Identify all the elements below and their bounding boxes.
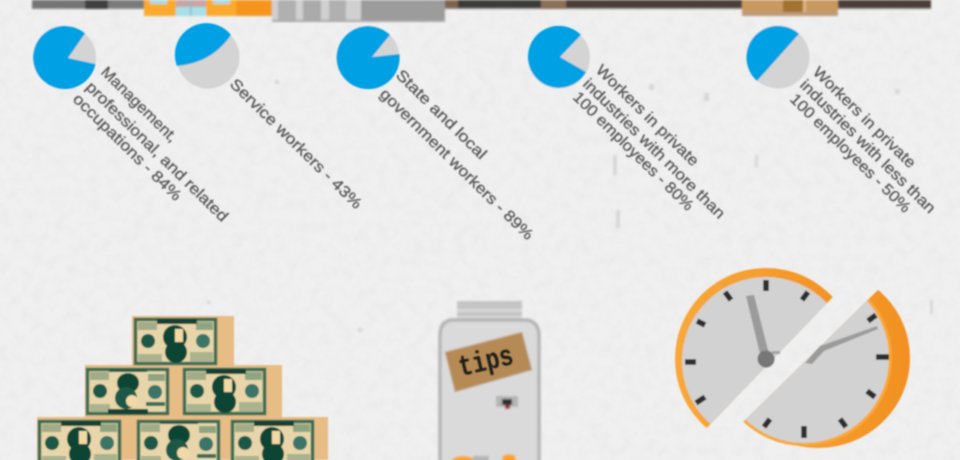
bill: middle left (88, 369, 168, 414)
caption: state and local: State and local (392, 67, 490, 163)
clock left half (674, 267, 834, 429)
caption: government workers: government workers - 89% (376, 86, 537, 244)
rotated pie captions (69, 62, 939, 244)
pie: private industries under 100 employees 50% (746, 26, 810, 88)
jar lid (457, 301, 522, 321)
bill: bottom right (232, 421, 312, 460)
pie: private industries over 100 employees 80% (528, 26, 590, 89)
clock hour ticks (685, 280, 889, 438)
building: grey office block (272, 0, 445, 22)
caption: industries with more than: industries with more than (579, 76, 728, 222)
pie: service workers 43% (175, 23, 240, 88)
building: tan house (742, 0, 838, 16)
icon: clock split in two (675, 268, 910, 450)
pie charts row (33, 23, 810, 89)
caption: service workers: Service workers - 43% (226, 76, 365, 213)
caption: 100 employees 80%: 100 employees - 80% (569, 89, 697, 215)
building: orange house (144, 0, 272, 16)
jar label text: tips (456, 340, 517, 386)
bill: middle right (184, 369, 264, 414)
top band: cropped building illustrations (32, 0, 931, 22)
building: dark brown row (445, 0, 931, 9)
building: grey storefront (32, 0, 144, 9)
jar body (440, 320, 539, 460)
clock right half (742, 289, 911, 449)
caption: management line 2: professional, and related (82, 79, 231, 225)
pie: state and local government 89% (336, 26, 400, 89)
spider (496, 396, 518, 409)
bill: bottom left (40, 421, 120, 460)
caption: management: Management, (97, 64, 180, 146)
caption: management line 3: occupations - 84% (69, 91, 185, 205)
icon: tips jar (440, 301, 539, 460)
caption: workers in private: Workers in private (809, 64, 919, 172)
paper specks (207, 80, 933, 332)
jar label (445, 332, 532, 392)
caption: workers in private: Workers in private (592, 62, 702, 170)
bill: bottom middle (138, 421, 218, 460)
clock hands (746, 295, 878, 368)
bill: top row (136, 319, 216, 364)
tan bill backing (37, 316, 328, 460)
caption: industries with less than: industries with less than (796, 77, 939, 217)
coins (452, 454, 516, 460)
caption: 100 employees 50%: 100 employees - 50% (786, 91, 914, 217)
pie: management 84% (33, 26, 96, 89)
icon: pyramid of dollar bills (37, 316, 328, 460)
